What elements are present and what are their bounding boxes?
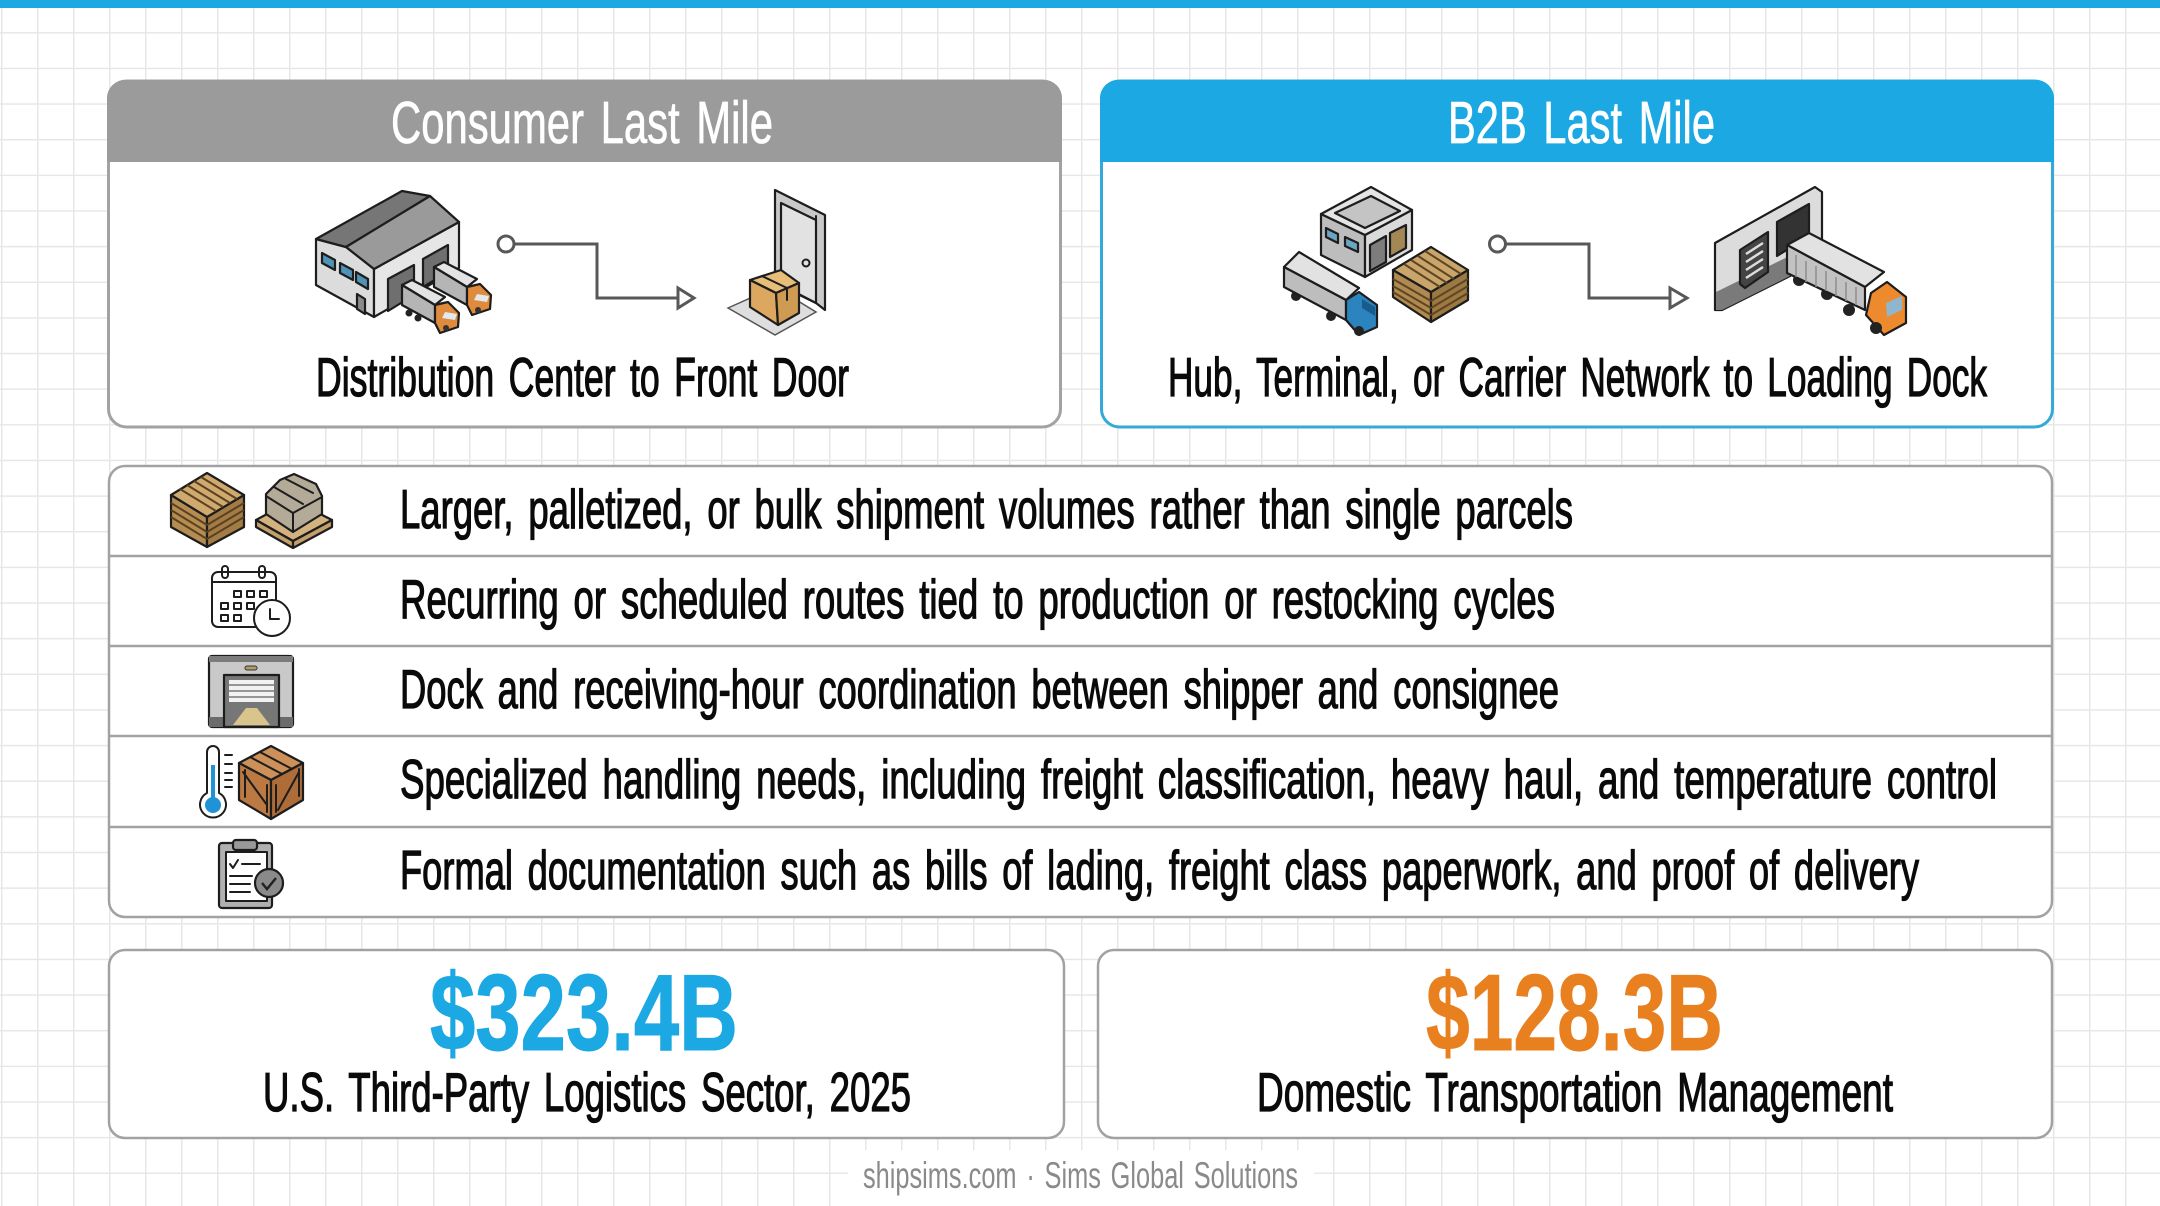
panel header: consumer	[107, 80, 1062, 162]
stat value: $323.4B: $323.4B	[430, 952, 738, 1074]
panel header: B2B	[1100, 80, 2054, 162]
icon: front door with parcel	[728, 190, 825, 335]
truck: front	[402, 280, 459, 333]
icon: clipboard with checkmark	[219, 840, 283, 908]
heading: B2B Last Mile: B2B Last Mile	[1448, 90, 1715, 156]
text: distribution center to front door: Distribution Center to Front Door	[316, 346, 849, 408]
footer credit: shipsims.com · Sims Global Solutions	[863, 1155, 1298, 1196]
icon: loading dock with truck	[1715, 187, 1906, 335]
icon: thermometer and crate	[200, 746, 303, 819]
truck: blue	[1284, 252, 1377, 336]
stat value: $128.3B: $128.3B	[1426, 952, 1723, 1074]
top accent bar	[0, 0, 2160, 8]
icon: hub building, truck and pallets	[1284, 187, 1468, 336]
arrow: B2B route	[1490, 236, 1687, 308]
icon: calendar with clock	[212, 566, 290, 636]
text: row 3: Dock and receiving-hour coordination between shipper and consignee	[400, 658, 1559, 720]
heading: Consumer Last Mile: Consumer Last Mile	[391, 90, 773, 156]
truck: rear	[434, 262, 491, 315]
panel: Consumer Last Mile	[107, 80, 1062, 427]
icon: warehouse with delivery trucks	[316, 191, 491, 333]
panel: stat 3PL sector	[109, 950, 1064, 1138]
text: row 1: Larger, palletized, or bulk shipment volumes rather than single parcels	[400, 478, 1573, 540]
truck: orange	[1787, 233, 1906, 335]
pallet stack	[1393, 247, 1468, 322]
text: row 2: Recurring or scheduled routes tied to production or restocking cycles	[400, 568, 1555, 630]
icon: dock door	[209, 656, 293, 727]
panel: B2B characteristics list	[109, 466, 2052, 917]
arrow: consumer route	[498, 236, 694, 308]
panel: B2B Last Mile	[1100, 80, 2054, 427]
stat label: 3PL sector: U.S. Third-Party Logistics Sector, 2025	[263, 1061, 911, 1123]
panel: stat domestic transportation	[1098, 950, 2052, 1138]
icon: pallets and bagged load	[171, 473, 332, 548]
